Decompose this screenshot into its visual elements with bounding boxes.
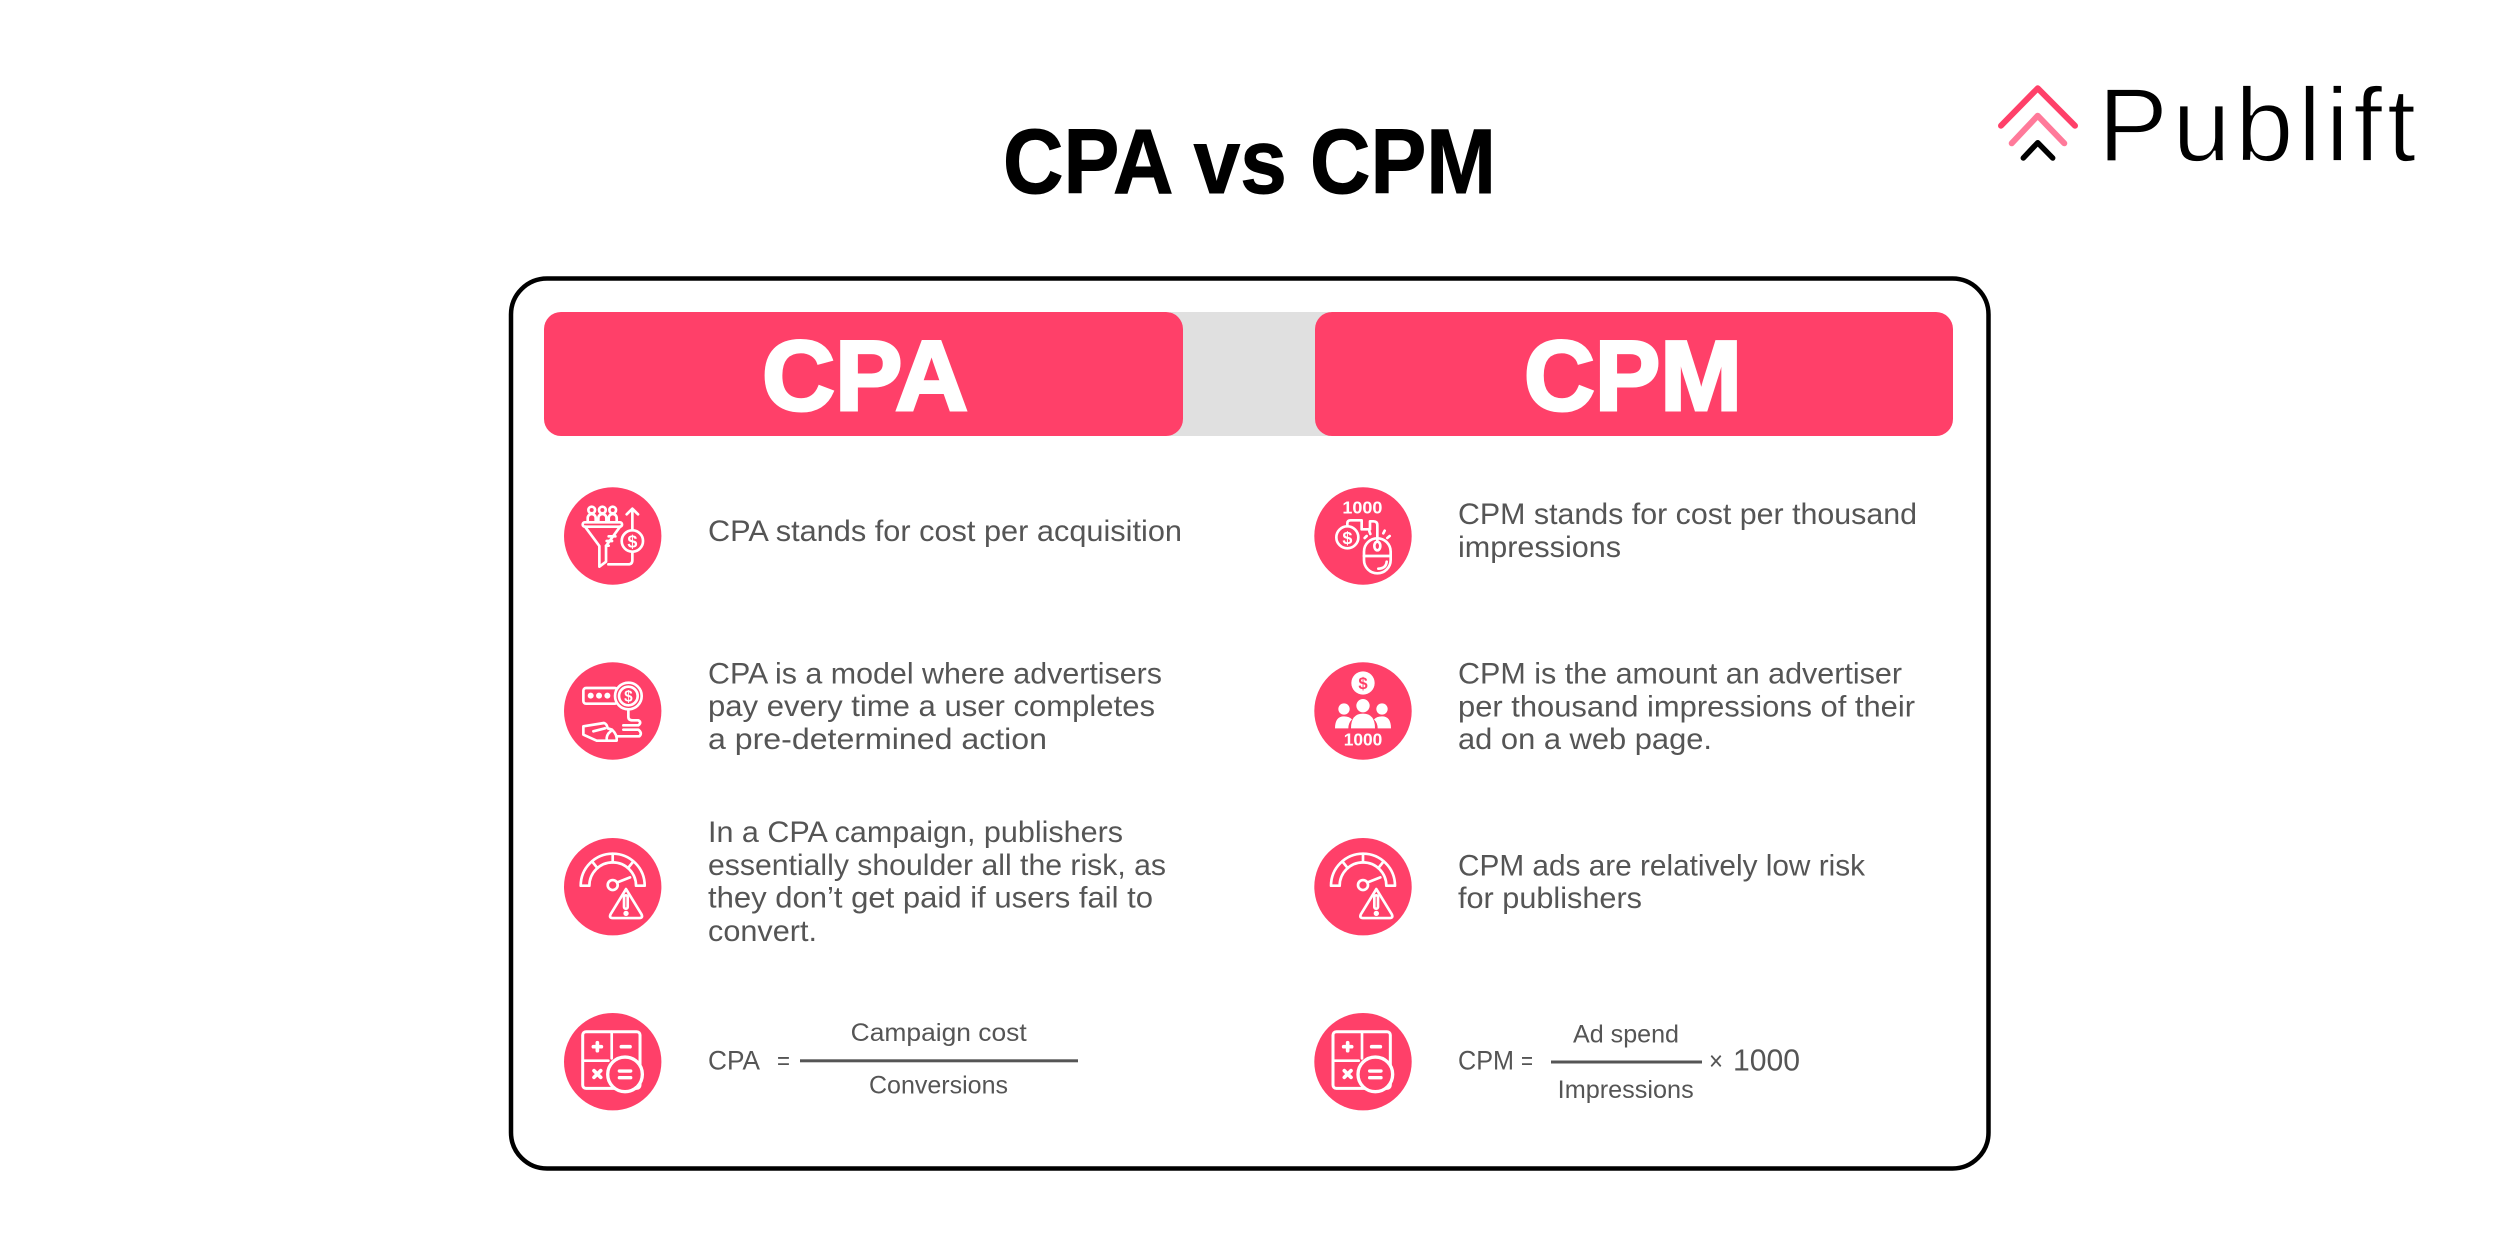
icon: calculator bbox=[564, 1013, 661, 1110]
text: CPM amount: ad on a web page. bbox=[1458, 723, 1712, 756]
icon: money and mouse click bbox=[1314, 487, 1412, 585]
text: CPM definition: CPM stands for cost per thousand bbox=[1458, 498, 1917, 531]
formula: CPM: × bbox=[1709, 1046, 1723, 1076]
text: CPA risk: In a CPA campaign, publishers bbox=[708, 816, 1123, 849]
card outline bbox=[511, 278, 1988, 1168]
text: CPM risk: CPM ads are relatively low risk bbox=[1458, 849, 1865, 882]
header band: grey connector bbox=[1170, 312, 1330, 436]
formula: CPA: Conversions bbox=[869, 1072, 1008, 1100]
icon: audience and dollar: 1000 bbox=[1344, 730, 1382, 750]
logo wordmark: Publift bbox=[2098, 67, 2416, 184]
text: CPM risk: for publishers bbox=[1458, 882, 1642, 915]
text: CPA model: a pre-determined action bbox=[708, 723, 1047, 756]
logo: Publift bbox=[2001, 67, 2416, 184]
header: CPA: CPA bbox=[762, 320, 968, 431]
text: CPM risk bbox=[1458, 849, 1865, 915]
icon: stacked chevrons bbox=[2001, 88, 2075, 158]
icon: calculator bbox=[1314, 1013, 1412, 1110]
formula: CPA bbox=[708, 1019, 1078, 1100]
formula: CPM: Impressions bbox=[1558, 1076, 1694, 1104]
title: CPA vs CPM bbox=[1003, 111, 1496, 213]
text: CPM amount: CPM is the amount an advertiser bbox=[1458, 658, 1902, 690]
icon: funnel with dollar bbox=[564, 487, 661, 585]
formula: CPM: = bbox=[1521, 1047, 1533, 1075]
icon: money and mouse click: $ bbox=[1342, 528, 1352, 548]
formula: CPM bbox=[1458, 1021, 1800, 1104]
text: CPA model bbox=[708, 658, 1162, 756]
header: CPA bbox=[544, 312, 1183, 436]
text: CPA model: CPA is a model where advertisers bbox=[708, 658, 1162, 690]
icon: funnel with dollar: $ bbox=[627, 531, 637, 551]
icon: audience and dollar: $ bbox=[1358, 674, 1368, 693]
text: CPM definition: impressions bbox=[1458, 531, 1621, 564]
formula: CPA: = bbox=[777, 1047, 790, 1075]
text: CPA definition: CPA stands for cost per acquisition bbox=[708, 515, 1182, 548]
formula: CPA: Campaign cost bbox=[851, 1019, 1027, 1047]
text: CPA risk: they don’t get paid if users fail to bbox=[708, 882, 1153, 914]
formula: CPM: 1000 bbox=[1733, 1043, 1800, 1078]
text: CPA model: pay every time a user completes bbox=[708, 690, 1155, 723]
header: CPM bbox=[1315, 312, 1953, 436]
icon: money and mouse click: 1000 bbox=[1342, 497, 1382, 517]
formula: CPA: CPA bbox=[708, 1045, 760, 1075]
icon: payment and hand: $ bbox=[624, 689, 633, 706]
text: CPM amount: per thousand impressions of their bbox=[1458, 690, 1915, 723]
icon: risk gauge bbox=[564, 838, 661, 935]
icon: audience and dollar bbox=[1314, 662, 1412, 760]
formula: CPM: CPM bbox=[1458, 1045, 1514, 1075]
text: CPA risk: convert. bbox=[708, 915, 817, 948]
header: CPM: CPM bbox=[1524, 320, 1742, 431]
text: CPA risk: essentially shoulder all the risk, as bbox=[708, 849, 1166, 882]
panel: comparison card bbox=[511, 278, 1988, 1168]
icon: risk gauge bbox=[1314, 838, 1412, 935]
text: CPA risk bbox=[708, 816, 1166, 948]
icon: payment and hand bbox=[564, 662, 661, 760]
text: CPM definition bbox=[1458, 498, 1917, 564]
formula: CPM: Ad spend bbox=[1573, 1021, 1679, 1049]
text: CPM amount bbox=[1458, 658, 1915, 756]
